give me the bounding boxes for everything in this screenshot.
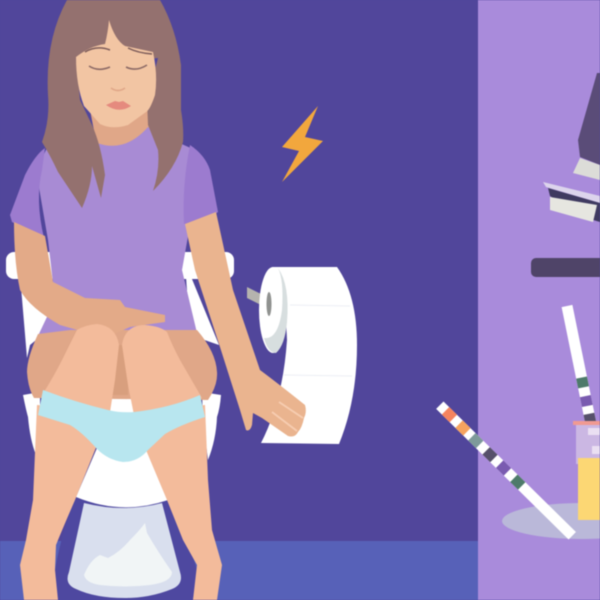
finger lines (272, 402, 303, 431)
roll shading (264, 268, 288, 353)
hips (27, 330, 217, 400)
strip bands (442, 407, 457, 422)
icon: lightning bolt (282, 106, 323, 182)
hair (42, 0, 183, 208)
left arm (14, 222, 165, 338)
shirt body (36, 127, 197, 338)
microscope base bar (531, 258, 600, 277)
holder end (266, 292, 272, 316)
toilet base (68, 503, 181, 598)
panel: bathroom wall (0, 0, 478, 541)
strip (562, 305, 597, 430)
nose (111, 88, 125, 90)
lips (106, 101, 131, 110)
left eyebrow (85, 48, 110, 52)
right sleeve (184, 145, 218, 224)
toilet tank right (185, 262, 219, 345)
left lower leg (20, 405, 105, 600)
paper perforations (284, 305, 352, 376)
icon: beaker of urine (573, 421, 600, 520)
urine (578, 458, 600, 520)
face (76, 20, 156, 127)
figure: woman (10, 0, 306, 600)
right eyebrow (128, 48, 152, 54)
panel: lab background (478, 0, 600, 600)
underwear (38, 390, 205, 462)
icon: test strip upright (562, 305, 597, 430)
icon: toilet (6, 252, 234, 600)
beaker rim (573, 421, 600, 425)
right thigh (122, 325, 202, 415)
toilet seat centre (108, 392, 136, 416)
microscope stage (543, 182, 600, 203)
left thigh (42, 324, 119, 412)
toilet seat right (202, 392, 221, 460)
roll end (259, 267, 287, 353)
right arm (185, 212, 306, 436)
strip (436, 401, 576, 540)
water highlight (84, 523, 172, 586)
microscope tube (578, 73, 600, 165)
floor shadow (55, 495, 197, 600)
stage underside (548, 188, 600, 222)
beaker glass (576, 424, 600, 464)
microscope lens (573, 158, 600, 180)
left eye (89, 66, 110, 69)
icon: microscope (531, 73, 600, 277)
glass highlight (588, 428, 600, 435)
paper sheet (261, 267, 357, 444)
inner gap (112, 345, 128, 395)
toilet tank left (20, 275, 60, 358)
toilet bowl (76, 448, 168, 507)
microscope condenser (550, 197, 597, 222)
toilet lid arms (6, 252, 234, 279)
neck (90, 110, 150, 148)
toilet seat left (23, 392, 40, 455)
right eye (126, 65, 147, 69)
panel: bathroom floor (0, 541, 478, 600)
left sleeve (10, 148, 45, 238)
right lower leg (138, 405, 222, 600)
icon: beaker shadow (502, 503, 600, 539)
icon: toilet paper roll (247, 267, 357, 444)
paper holder (247, 287, 269, 309)
strip bands (576, 376, 589, 388)
icon: test strip diagonal (436, 401, 576, 540)
